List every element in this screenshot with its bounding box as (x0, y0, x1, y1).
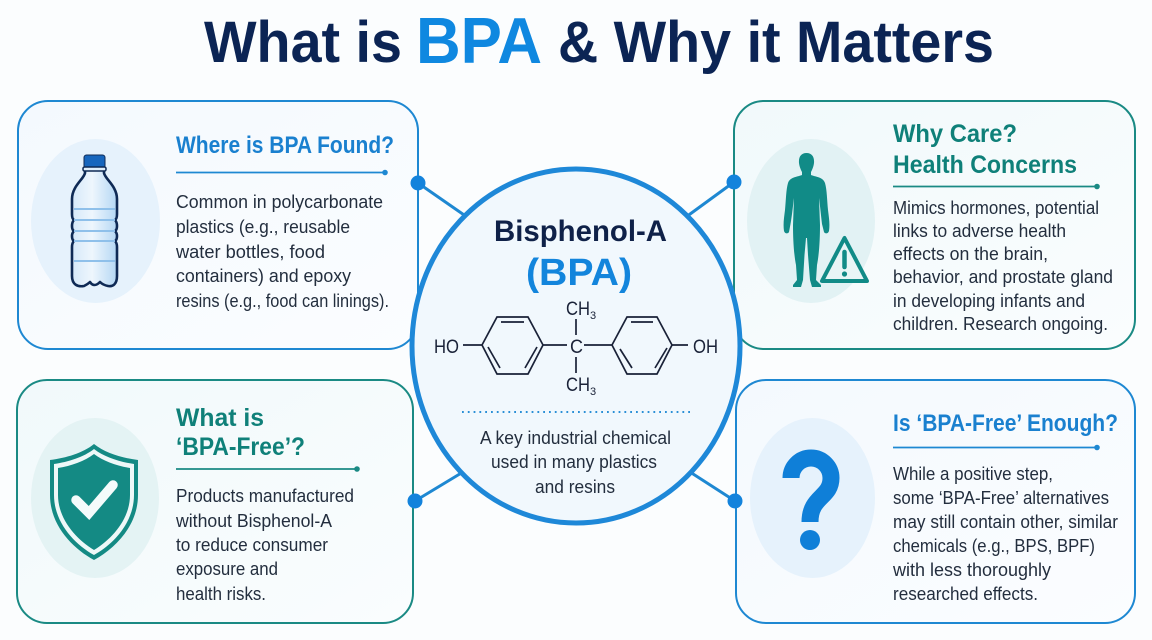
body text (892, 464, 1118, 604)
heading: ‘BPA-Free’? (176, 433, 305, 461)
body text: may still contain other, similar (893, 512, 1118, 532)
body text: exposure and (176, 559, 278, 579)
panel: what is BPA-free (17, 380, 413, 623)
heading: What is (176, 404, 264, 432)
central heading: (BPA) (526, 252, 632, 294)
body text (175, 192, 389, 311)
icon: water bottle (31, 139, 160, 303)
title: BPA (416, 4, 542, 77)
icon: question mark (750, 418, 875, 578)
body text: Mimics hormones, potential (893, 198, 1099, 218)
body text: Common in polycarbonate (176, 192, 383, 212)
central description: used in many plastics (491, 452, 657, 472)
chemical structure: C (570, 337, 583, 358)
icon: shield with check (31, 418, 159, 578)
connectors (408, 174, 742, 508)
body text: plastics (e.g., reusable (176, 217, 350, 237)
body text: water bottles, food (175, 242, 325, 262)
chemical structure: OH (693, 337, 718, 358)
body text (893, 198, 1113, 334)
body text: researched effects. (893, 584, 1038, 604)
heading rule (893, 445, 1100, 450)
central description: A key industrial chemical (480, 428, 671, 448)
body text: with less thoroughly (892, 560, 1051, 580)
body text: without Bisphenol-A (175, 511, 332, 531)
central heading: Bisphenol-A (494, 215, 667, 248)
body text (175, 486, 354, 604)
body text: containers) and epoxy (176, 266, 351, 286)
chemical structure: CH (566, 375, 590, 396)
title: What is (204, 10, 402, 75)
body text: to reduce consumer (176, 535, 328, 555)
heading: Why Care? (893, 120, 1017, 148)
body text: behavior, and prostate gland (893, 267, 1113, 287)
heading: Is ‘BPA-Free’ Enough? (893, 410, 1118, 437)
icon: human figure with warning (747, 139, 875, 303)
body text: While a positive step, (893, 464, 1053, 484)
chemical structure: HO (434, 337, 459, 358)
central description (480, 428, 671, 497)
heading: Health Concerns (893, 151, 1077, 179)
body text: chemicals (e.g., BPS, BPF) (893, 536, 1095, 556)
chemical structure: 3 (590, 386, 596, 398)
body text: Products manufactured (176, 486, 354, 506)
chemical structure (434, 299, 718, 398)
panel: is BPA-free enough (736, 380, 1135, 623)
chemical structure: 3 (590, 310, 596, 322)
body text: children. Research ongoing. (893, 314, 1108, 334)
heading (176, 404, 305, 461)
title (204, 4, 994, 77)
heading rule (176, 170, 388, 175)
central heading (494, 215, 667, 294)
heading rule (176, 466, 360, 472)
central description: and resins (535, 477, 615, 497)
chemical structure: CH (566, 299, 590, 320)
heading rule (893, 184, 1100, 189)
panel: where is BPA found (18, 101, 418, 349)
body text: in developing infants and (893, 291, 1085, 311)
body text: health risks. (176, 584, 266, 604)
heading: Where is BPA Found? (176, 132, 394, 159)
body text: some ‘BPA-Free’ alternatives (893, 488, 1109, 508)
dotted divider (462, 411, 692, 413)
body text: resins (e.g., food can linings). (176, 291, 389, 311)
title: & Why it Matters (558, 10, 994, 75)
body text: links to adverse health (893, 221, 1066, 241)
heading (893, 120, 1077, 179)
body text: effects on the brain, (893, 244, 1048, 264)
panel: why care health concerns (734, 101, 1135, 349)
central circle: Bisphenol-A (412, 169, 740, 523)
